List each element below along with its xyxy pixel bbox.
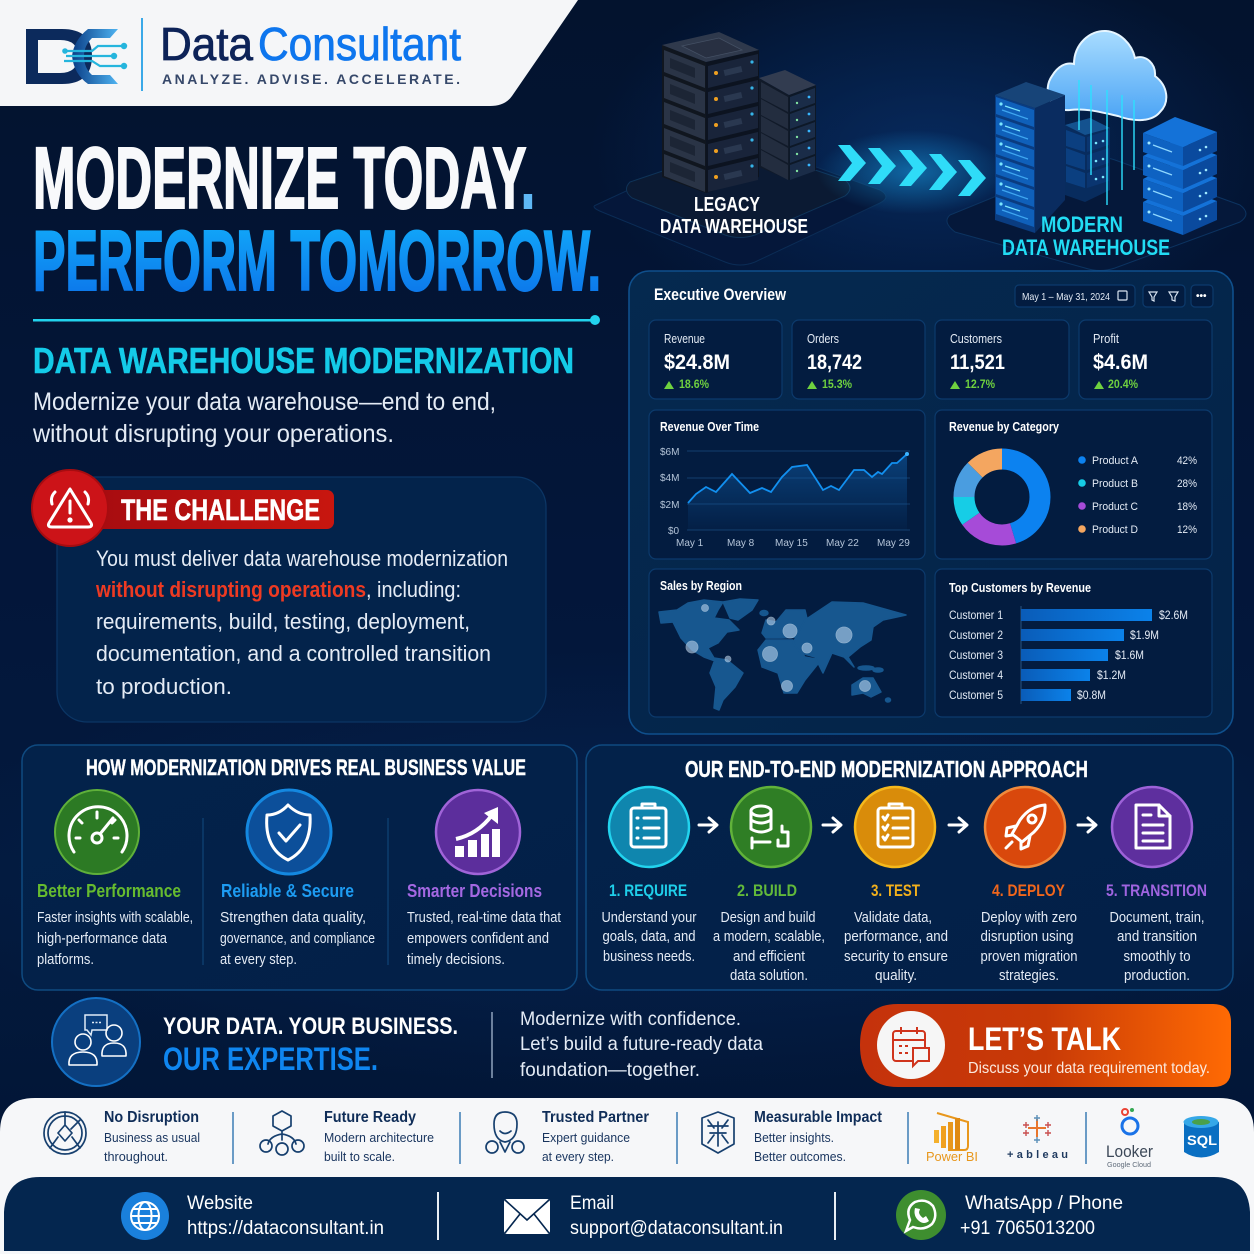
icon: growth chart bbox=[436, 790, 520, 874]
panel heading: HOW MODERNIZATION DRIVES REAL BUSINESS VALUE bbox=[86, 755, 526, 780]
benefit: future ready: built to scale. bbox=[324, 1149, 395, 1164]
contact: whatsapp phone: WhatsApp / Phone bbox=[965, 1193, 1123, 1214]
logo: power bi bbox=[926, 1113, 978, 1164]
icon: warning bbox=[32, 470, 108, 546]
value: better performance: Better Performance bbox=[37, 881, 181, 901]
chart: revenue over time: May 15 bbox=[775, 538, 808, 549]
icon: people expertise bbox=[52, 998, 140, 1086]
closing statement bbox=[520, 1008, 763, 1081]
benefit: trusted partner bbox=[542, 1109, 649, 1164]
chart: top customers by revenue: Customer 2 bbox=[949, 630, 1003, 642]
kpi: orders: 18,742 bbox=[807, 351, 862, 374]
logo: sql database: SQL bbox=[1187, 1132, 1217, 1148]
icon: database build bbox=[731, 787, 811, 867]
step 1: 1. REQUIRE bbox=[609, 881, 687, 900]
chart: revenue over time: $4M bbox=[660, 473, 679, 484]
chart: top customers by revenue: $2.6M bbox=[1159, 610, 1188, 622]
chart: revenue by category: Product A bbox=[1092, 455, 1139, 467]
step 4: strategies. bbox=[999, 968, 1059, 984]
dashboard title: Executive Overview bbox=[654, 286, 786, 304]
icon: rocket deploy bbox=[985, 787, 1065, 867]
panel: business value bbox=[22, 745, 577, 990]
benefit: trusted partner: Expert guidance bbox=[542, 1130, 630, 1145]
benefit: no disruption bbox=[104, 1109, 200, 1164]
legacy label bbox=[660, 194, 808, 238]
icon: gauge bbox=[55, 790, 139, 874]
kpi: profit: 20.4% bbox=[1108, 377, 1138, 391]
contact: website bbox=[187, 1193, 384, 1239]
logo: looker bbox=[1106, 1108, 1153, 1169]
icon: clipboard require bbox=[609, 787, 689, 867]
modern label bbox=[1002, 212, 1170, 260]
chart: revenue over time bbox=[649, 410, 925, 559]
kpi: profit: Profit bbox=[1093, 332, 1119, 346]
tagline: ANALYZE. ADVISE. ACCELERATE. bbox=[162, 71, 460, 87]
headline: PERFORM TOMORROW. bbox=[33, 214, 601, 309]
kpi: profit: $4.6M bbox=[1093, 351, 1148, 374]
date filter: ••• bbox=[1196, 291, 1207, 302]
step 3: 3. TEST bbox=[871, 881, 920, 900]
arrow bbox=[949, 818, 967, 832]
step 3: quality. bbox=[875, 968, 917, 984]
icon: shield bbox=[247, 790, 331, 874]
map: sales by region: Sales by Region bbox=[660, 579, 742, 593]
intro text: Modernize your data warehouse—end to end, bbox=[33, 388, 496, 416]
step 5: production. bbox=[1124, 968, 1190, 984]
contact: email: Email bbox=[570, 1193, 614, 1214]
step 3: performance, and bbox=[844, 929, 948, 945]
value: reliable and secure: governance, and compliance bbox=[220, 931, 375, 947]
chart: revenue by category bbox=[935, 410, 1212, 559]
legacy label: DATA WAREHOUSE bbox=[660, 216, 808, 238]
benefit: trusted partner: at every step. bbox=[542, 1149, 614, 1164]
chart: revenue over time: May 29 bbox=[877, 538, 910, 549]
chart: top customers by revenue: Top Customers by Revenue bbox=[949, 581, 1091, 595]
chart: top customers by revenue: Customer 1 bbox=[949, 610, 1003, 622]
kpi: customers: 11,521 bbox=[950, 351, 1005, 374]
benefit: no disruption: No Disruption bbox=[104, 1109, 199, 1126]
step 1 bbox=[602, 881, 697, 965]
benefit: measurable impact: Measurable Impact bbox=[754, 1109, 883, 1126]
migration arrows bbox=[817, 130, 1007, 214]
closing statement: Modernize with confidence. bbox=[520, 1008, 741, 1030]
contact: email bbox=[570, 1193, 783, 1239]
headline bbox=[33, 130, 601, 309]
challenge text: requirements, build, testing, deployment, bbox=[96, 609, 470, 634]
icon: whatsapp bbox=[896, 1190, 946, 1240]
step 4: Deploy with zero bbox=[981, 910, 1077, 926]
step 5 bbox=[1106, 881, 1207, 984]
step 2 bbox=[713, 881, 825, 984]
benefits strip bbox=[0, 1098, 1254, 1254]
value: better performance: platforms. bbox=[37, 952, 94, 968]
chart: top customers by revenue: $1.2M bbox=[1097, 670, 1126, 682]
logo: tableau bbox=[1007, 1115, 1068, 1161]
benefit: no disruption: throughout. bbox=[104, 1149, 168, 1164]
subheading: DATA WAREHOUSE MODERNIZATION bbox=[33, 340, 574, 381]
kpi: revenue: Revenue bbox=[664, 332, 705, 346]
closing statement: foundation—together. bbox=[520, 1059, 700, 1081]
chart: revenue over time: May 8 bbox=[727, 538, 755, 549]
legacy label: LEGACY bbox=[694, 194, 761, 216]
kpi: customers: Customers bbox=[950, 332, 1002, 346]
chart: top customers by revenue: $0.8M bbox=[1077, 690, 1106, 702]
icon: trusted partner bbox=[486, 1112, 524, 1153]
benefit: measurable impact: Better insights. bbox=[754, 1130, 834, 1145]
value: better performance: Faster insights with scalable, bbox=[37, 910, 193, 926]
chart: revenue by category: Product C bbox=[1092, 501, 1138, 513]
step 3: Validate data, bbox=[854, 910, 932, 926]
chart: revenue by category: Product B bbox=[1092, 478, 1138, 490]
benefit: trusted partner: Trusted Partner bbox=[542, 1109, 649, 1126]
value: smarter decisions: Trusted, real-time data that bbox=[407, 910, 561, 926]
brand name bbox=[160, 18, 461, 70]
chart: top customers by revenue: Customer 3 bbox=[949, 650, 1003, 662]
step 3 bbox=[844, 881, 948, 984]
intro text bbox=[32, 388, 496, 448]
brand name: Data bbox=[160, 18, 253, 70]
step 4: 4. DEPLOY bbox=[992, 881, 1066, 900]
tagline: your data bbox=[163, 1013, 458, 1077]
value: better performance: high-performance data bbox=[37, 931, 168, 947]
challenge text: You must deliver data warehouse modernization bbox=[96, 546, 508, 571]
date filter: May 1 – May 31, 2024 bbox=[1022, 291, 1110, 303]
panel: the challenge bbox=[32, 470, 546, 722]
headline rule bbox=[33, 315, 600, 325]
kpi: orders: Orders bbox=[807, 332, 839, 346]
chart: revenue by category: Product D bbox=[1092, 524, 1138, 536]
contact footer bbox=[4, 1177, 1250, 1251]
step 1: Understand your bbox=[602, 910, 697, 926]
chart: top customers by revenue: Customer 5 bbox=[949, 690, 1003, 702]
map: sales by region bbox=[649, 569, 925, 717]
value: better performance bbox=[37, 881, 193, 968]
panel: approach bbox=[586, 745, 1233, 990]
contact: whatsapp phone: +91 7065013200 bbox=[960, 1218, 1095, 1239]
chart: revenue over time: Revenue Over Time bbox=[660, 420, 759, 434]
step 2: data solution. bbox=[730, 968, 808, 984]
icon: document transition bbox=[1112, 787, 1192, 867]
chart: top customers by revenue: $1.6M bbox=[1115, 650, 1144, 662]
call to action button: Discuss your data requirement today. bbox=[968, 1060, 1210, 1077]
kpi: profit bbox=[1079, 320, 1212, 399]
benefit: future ready: Future Ready bbox=[324, 1109, 416, 1126]
date filter bbox=[1015, 285, 1213, 307]
challenge text bbox=[95, 546, 508, 699]
kpi: customers bbox=[935, 320, 1069, 399]
arrow bbox=[823, 818, 841, 832]
contact: website: Website bbox=[187, 1193, 253, 1214]
benefit: measurable impact bbox=[754, 1109, 883, 1164]
chart: revenue over time: May 22 bbox=[826, 538, 859, 549]
contact: whatsapp phone bbox=[960, 1193, 1123, 1239]
header logo banner bbox=[0, 0, 578, 106]
chart: revenue over time: $0 bbox=[668, 526, 680, 537]
panel heading: OUR END-TO-END MODERNIZATION APPROACH bbox=[685, 756, 1088, 782]
value: reliable and secure: Strengthen data quality, bbox=[220, 910, 366, 926]
kpi: revenue: 18.6% bbox=[679, 377, 709, 391]
chart: revenue over time: May 1 bbox=[676, 538, 704, 549]
modern label: MODERN bbox=[1041, 212, 1123, 237]
logo: looker: Google Cloud bbox=[1107, 1162, 1151, 1169]
step 1: business needs. bbox=[603, 949, 695, 965]
call to action button bbox=[860, 1004, 1231, 1087]
benefit: measurable impact: Better outcomes. bbox=[754, 1149, 846, 1164]
contact: website: https://dataconsultant.in bbox=[187, 1218, 384, 1239]
modern label: DATA WAREHOUSE bbox=[1002, 235, 1170, 260]
contact: email: support@dataconsultant.in bbox=[570, 1218, 783, 1239]
step 5: Document, train, bbox=[1110, 910, 1204, 926]
logo: power bi: Power BI bbox=[926, 1149, 978, 1164]
arrow bbox=[699, 818, 717, 832]
chart: revenue by category: 18% bbox=[1177, 501, 1197, 513]
call to action button: LET’S TALK bbox=[968, 1021, 1121, 1057]
intro text: without disrupting your operations. bbox=[32, 420, 394, 448]
ribbon heading bbox=[96, 490, 334, 529]
icon: envelope bbox=[504, 1199, 550, 1234]
chart: top customers by revenue bbox=[935, 569, 1212, 717]
chart: revenue by category: Revenue by Category bbox=[949, 420, 1059, 434]
panel: executive overview dashboard bbox=[629, 271, 1233, 734]
icon: calendar chat bbox=[877, 1011, 945, 1079]
kpi: customers: 12.7% bbox=[965, 377, 995, 391]
value: reliable and secure: at every step. bbox=[220, 952, 297, 968]
kpi: orders: 15.3% bbox=[822, 377, 852, 391]
step 5: 5. TRANSITION bbox=[1106, 881, 1207, 900]
value: smarter decisions: empowers confident and bbox=[407, 931, 549, 947]
challenge text: to production. bbox=[96, 674, 232, 699]
modern data warehouse illustration bbox=[947, 31, 1246, 270]
icon: no disruption bbox=[44, 1112, 86, 1154]
chart: revenue by category: 42% bbox=[1177, 455, 1197, 467]
chart: revenue by category: 28% bbox=[1177, 478, 1197, 490]
step 4: disruption using bbox=[980, 929, 1074, 945]
logo: sql database bbox=[1184, 1116, 1219, 1158]
step 4 bbox=[980, 881, 1078, 984]
kpi: orders bbox=[792, 320, 925, 399]
chart: revenue by category: 12% bbox=[1177, 524, 1197, 536]
icon: DC logo bbox=[26, 29, 127, 84]
chart: revenue over time: $6M bbox=[660, 447, 679, 458]
value: smarter decisions bbox=[407, 881, 561, 968]
headline: MODERNIZE TODAY. bbox=[33, 130, 535, 227]
step 2: and efficient bbox=[733, 949, 805, 965]
ribbon heading: THE CHALLENGE bbox=[121, 494, 320, 527]
value: smarter decisions: timely decisions. bbox=[407, 952, 505, 968]
logo: tableau: +ableau bbox=[1007, 1149, 1068, 1161]
challenge text: without disrupting operations bbox=[95, 577, 366, 602]
kpi: revenue: $24.8M bbox=[664, 351, 730, 374]
kpi: revenue bbox=[649, 320, 782, 399]
step 5: and transition bbox=[1117, 929, 1197, 945]
icon: future ready bbox=[260, 1111, 304, 1155]
benefit: no disruption: Business as usual bbox=[104, 1130, 200, 1145]
icon: globe bbox=[121, 1192, 169, 1240]
step 3: security to ensure bbox=[844, 949, 948, 965]
step 2: 2. BUILD bbox=[737, 881, 797, 900]
step 2: Design and build bbox=[720, 910, 816, 926]
step 2: a modern, scalable, bbox=[713, 929, 825, 945]
challenge text: , including: bbox=[366, 577, 461, 602]
chart: top customers by revenue: $1.9M bbox=[1130, 630, 1159, 642]
icon: measurable impact bbox=[702, 1112, 734, 1153]
tagline: your data: OUR EXPERTISE. bbox=[163, 1041, 378, 1077]
step 1: goals, data, and bbox=[602, 929, 696, 945]
benefit: future ready bbox=[324, 1109, 434, 1164]
closing statement: Let’s build a future-ready data bbox=[520, 1033, 763, 1055]
tagline: your data: YOUR DATA. YOUR BUSINESS. bbox=[163, 1013, 458, 1040]
icon: checklist test bbox=[855, 787, 935, 867]
arrow bbox=[1078, 818, 1096, 832]
value: smarter decisions: Smarter Decisions bbox=[407, 881, 542, 901]
value: reliable and secure bbox=[220, 881, 375, 968]
brand name: Consultant bbox=[258, 18, 461, 70]
step 4: proven migration bbox=[980, 949, 1078, 965]
icon: cloud bbox=[1048, 31, 1166, 120]
challenge text: documentation, and a controlled transition bbox=[96, 641, 491, 666]
step 5: smoothly to bbox=[1124, 949, 1190, 965]
benefit: future ready: Modern architecture bbox=[324, 1130, 434, 1145]
chart: revenue over time: $2M bbox=[660, 500, 679, 511]
legacy data warehouse illustration bbox=[594, 32, 886, 265]
logo: looker: Looker bbox=[1106, 1142, 1153, 1161]
value: reliable and secure: Reliable & Secure bbox=[221, 881, 354, 901]
chart: top customers by revenue: Customer 4 bbox=[949, 670, 1004, 682]
